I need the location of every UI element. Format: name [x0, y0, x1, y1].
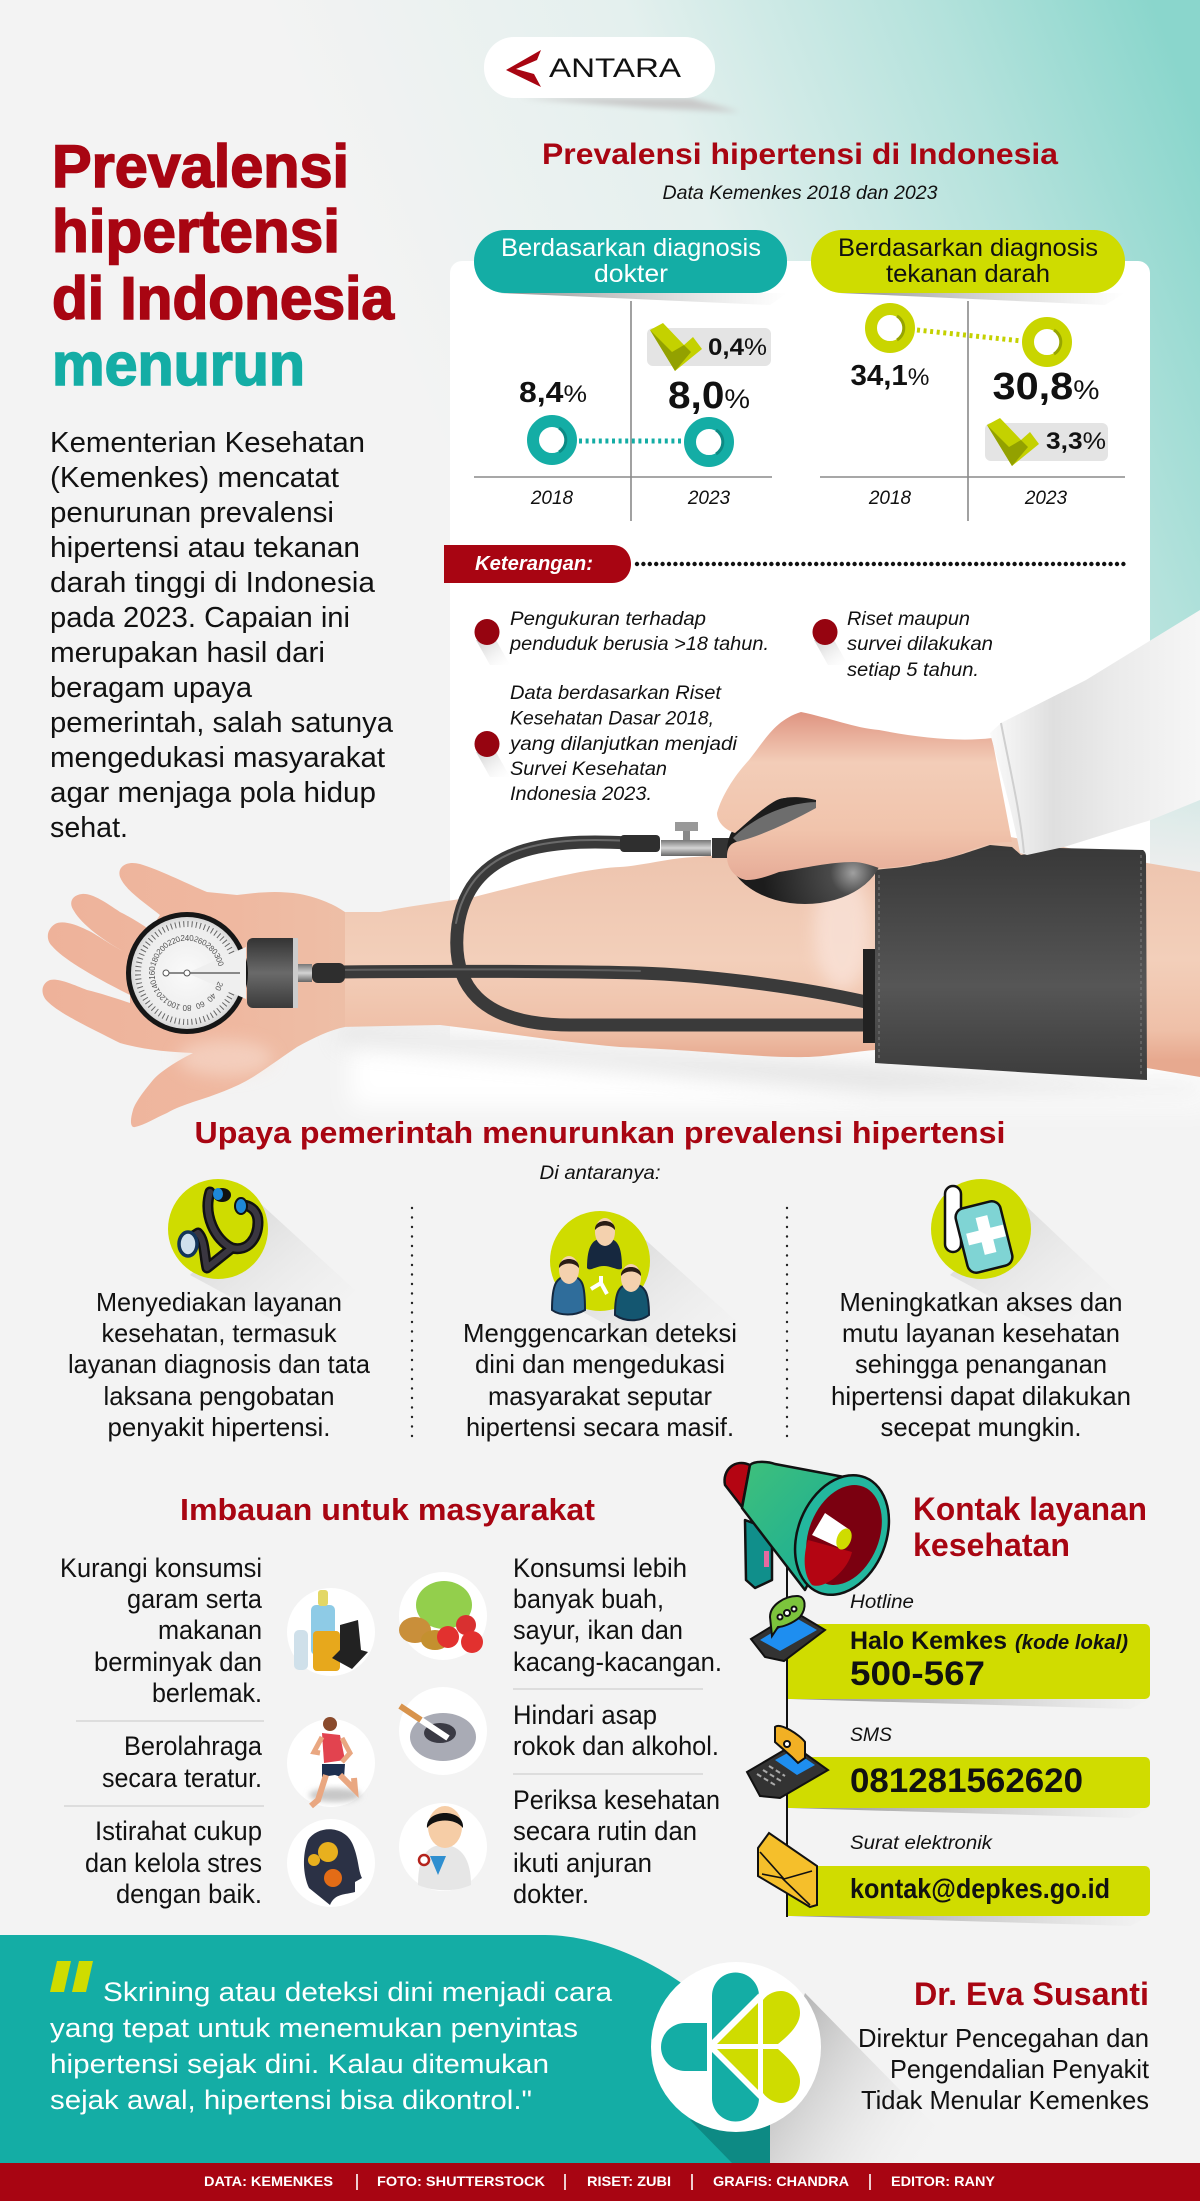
advice: exercise: Berolahraga [124, 1731, 262, 1761]
intro paragraph: Kementerian Kesehatan [50, 427, 365, 459]
illustration: arm with blood pressure monitor [42, 610, 1200, 1127]
intro paragraph: beragam upaya [50, 672, 252, 704]
advice: exercise: secara teratur. [102, 1763, 262, 1793]
intro paragraph: pemerintah, salah satunya [50, 707, 393, 739]
heading: imbauan: Imbauan untuk masyarakat [180, 1492, 595, 1527]
text: layanan diagnosis dan tata [68, 1349, 371, 1379]
logo: ANTARA: ANTARA [549, 53, 681, 83]
contact box 2: SMS [850, 1725, 892, 1746]
year labels: 2023 [687, 488, 731, 509]
note 1: Pengukuran terhadap [510, 609, 706, 630]
squeezing hand [717, 712, 1012, 880]
advice: rest [85, 1816, 262, 1909]
speaker: Dr. Eva Susanti [914, 1976, 1149, 2012]
gauge dial: 260 [192, 934, 209, 948]
chart heading: Data Kemenkes 2018 dan 2023 [662, 183, 938, 204]
gauge dial: 300 [212, 952, 226, 968]
contact box 1: Hotline [850, 1592, 914, 1613]
advice: fruit and vegetables: Konsumsi lebih [513, 1553, 687, 1583]
main title: hipertensi [52, 198, 340, 265]
icon: vegetables [399, 1572, 487, 1660]
text [831, 1287, 1131, 1442]
intro paragraph: sehat. [50, 812, 128, 844]
note 3: setiap 5 tahun. [847, 660, 979, 681]
note 2: Data berdasarkan Riset [510, 683, 722, 704]
icon: megaphone [725, 1461, 906, 1609]
gauge dial [126, 912, 248, 1034]
text: sehingga penanganan [855, 1349, 1107, 1379]
main title: di Indonesia [52, 265, 395, 332]
icon: runner [287, 1717, 375, 1807]
contact box 1: (kode lokal) [1015, 1632, 1128, 1654]
intro paragraph: darah tinggi di Indonesia [50, 567, 375, 599]
advice right column [513, 1553, 722, 1909]
gauge dial: 200 [155, 940, 171, 957]
advice: smoke and alcohol [513, 1700, 719, 1761]
value 2018: 8,4% [519, 377, 587, 409]
advice: salt and fat: berlemak. [152, 1678, 262, 1708]
text: dini dan mengedukasi [475, 1349, 725, 1379]
advice: smoke and alcohol: rokok dan alkohol. [513, 1731, 719, 1761]
text: Menyediakan layanan [96, 1287, 342, 1317]
icon: stressed head [287, 1819, 375, 1907]
gauge body [247, 938, 345, 1008]
icon: stethoscope [168, 1179, 268, 1279]
contact box 3 [787, 1833, 1150, 1926]
advice: rest: dan kelola stres [85, 1848, 262, 1878]
note 1 [474, 609, 769, 665]
value 2018: 34,1% [850, 360, 930, 392]
advice: checkup: dokter. [513, 1879, 589, 1909]
pill: diagnosis dokter [474, 230, 787, 293]
text: Meningkatkan akses dan [840, 1287, 1122, 1317]
contact box 3: kontak@depkes.go.id [850, 1873, 1110, 1904]
value 2023: 8,0% [668, 375, 750, 417]
advice: fruit and vegetables [513, 1553, 722, 1677]
intro paragraph: hipertensi atau tekanan [50, 532, 360, 564]
bulb [727, 796, 883, 904]
footer credits: RISET: ZUBI [587, 2173, 671, 2189]
speaker: Pengendalian Penyakit [890, 2054, 1150, 2084]
note 2 [474, 683, 738, 805]
contact box 2: 081281562620 [850, 1762, 1083, 1800]
badge: decrease 3,3% [985, 418, 1108, 466]
text [463, 1318, 737, 1442]
advice: smoke and alcohol: Hindari asap [513, 1700, 657, 1730]
year labels: 2023 [1024, 488, 1068, 509]
chart heading [542, 138, 1058, 204]
badge: decrease 3,3%: 3,3% [1046, 428, 1106, 455]
main title [52, 133, 395, 398]
gauge dial: 100 [165, 998, 182, 1012]
gauge dial: 160 [148, 966, 157, 980]
white chart panel [450, 261, 1150, 1040]
arm [340, 835, 1200, 1077]
footer credits: DATA: KEMENKES [204, 2173, 333, 2189]
footer credits: GRAFIS: CHANDRA [713, 2173, 849, 2189]
note 1: penduduk berusia >18 tahun. [509, 634, 769, 655]
intro paragraph: merupakan hasil dari [50, 637, 325, 669]
valve [620, 822, 732, 858]
icon: phone with chat [751, 1596, 825, 1661]
note 2: yang dilanjutkan menjadi [508, 734, 738, 755]
ring 2023 [690, 423, 728, 461]
intro paragraph: agar menjaga pola hidup [50, 777, 376, 809]
contact timeline [787, 1560, 1150, 1926]
quote text: Skrining atau deteksi dini menjadi cara [103, 1977, 613, 2007]
year labels [530, 488, 731, 509]
speaker: Direktur Pencegahan dan [858, 2023, 1149, 2053]
footer credits: EDITOR: RANY [891, 2173, 996, 2189]
keterangan tag: Keterangan: [475, 553, 593, 575]
text: secepat mungkin. [880, 1412, 1082, 1442]
pill: diagnosis dokter: Berdasarkan diagnosis [501, 234, 761, 262]
quote text: hipertensi sejak dini. Kalau ditemukan [50, 2049, 549, 2079]
keterangan tag [444, 545, 631, 583]
gauge dial: 20 [213, 980, 225, 993]
footer credits [0, 2163, 1200, 2201]
main title: Prevalensi [52, 133, 349, 200]
advice: checkup [513, 1785, 720, 1909]
text: hipertensi dapat dilakukan [831, 1381, 1131, 1411]
gauge dial: 60 [194, 999, 206, 1011]
text: penyakit hipertensi. [108, 1412, 330, 1442]
advice: salt and fat: makanan [158, 1615, 262, 1645]
gauge dial: 180 [148, 951, 162, 968]
gauge dial: 280 [203, 941, 220, 957]
icon: ashtray [399, 1687, 487, 1775]
ring 2023 [1028, 323, 1066, 361]
gauge dial: 140 [148, 978, 162, 994]
advice: salt and fat: berminyak dan [94, 1647, 262, 1677]
chart: diagnosis tekanan darah [811, 230, 1125, 521]
advice: rest: Istirahat cukup [95, 1816, 262, 1846]
value 2023: 30,8 % [992, 366, 1100, 408]
intro paragraph: mengedukasi masyarakat [50, 742, 385, 774]
intro paragraph: pada 2023. Capaian ini [50, 602, 350, 634]
cuff [863, 845, 1147, 1080]
contact box 1: Halo Kemkes [850, 1627, 1007, 1655]
pill: tekanan darah [811, 230, 1125, 293]
section heading: upaya pemerintah: Upaya pemerintah menurunkan prevalensi hipertensi [194, 1115, 1006, 1150]
quote panel [0, 1935, 949, 2163]
text: Menggencarkan deteksi [463, 1318, 737, 1348]
gauge dial: 40 [205, 991, 218, 1004]
notes [474, 609, 993, 805]
advice: rest: dengan baik. [116, 1879, 262, 1909]
ring 2018 [533, 421, 571, 459]
text: hipertensi secara masif. [466, 1412, 734, 1442]
note 2: Indonesia 2023. [510, 784, 652, 805]
intro paragraph [50, 427, 393, 844]
advice left column [60, 1553, 703, 1909]
note 3: survei dilakukan [847, 634, 993, 655]
note 3 [812, 609, 993, 681]
quote text: sejak awal, hipertensi bisa dikontrol." [50, 2085, 532, 2115]
text [68, 1287, 371, 1442]
advice: checkup: Periksa kesehatan [513, 1785, 720, 1815]
pill: diagnosis dokter: dokter [594, 260, 668, 288]
advice: fruit and vegetables: sayur, ikan dan [513, 1615, 683, 1645]
section heading: upaya pemerintah [194, 1115, 1006, 1184]
icon: keypad phone with chat [747, 1726, 828, 1798]
note 2: Survei Kesehatan [510, 759, 667, 780]
text: masyarakat seputar [488, 1381, 712, 1411]
year labels [868, 488, 1068, 509]
icon: bottles and fat [287, 1588, 375, 1676]
advice: checkup: ikuti anjuran [513, 1848, 652, 1878]
quote mark [50, 1961, 93, 1992]
intro paragraph: (Kemenkes) mencatat [50, 462, 339, 494]
note 3: Riset maupun [847, 609, 970, 630]
gauge dial: 240 [180, 934, 194, 943]
icon: envelope [758, 1833, 817, 1907]
note 2: Kesehatan Dasar 2018, [510, 708, 714, 730]
speaker [858, 1976, 1150, 2115]
contact box 3: Surat elektronik [850, 1833, 994, 1854]
contact heading: kesehatan [913, 1527, 1070, 1563]
tubes [340, 840, 866, 1025]
year labels: 2018 [868, 488, 912, 509]
contact heading: Kontak layanan [913, 1491, 1147, 1527]
pill: tekanan darah: tekanan darah [886, 260, 1050, 288]
text: laksana pengobatan [104, 1381, 334, 1411]
effort column 2 [463, 1211, 737, 1442]
footer credits: FOTO: SHUTTERSTOCK [377, 2173, 545, 2189]
pill: tekanan darah: Berdasarkan diagnosis [838, 234, 1098, 262]
section heading: upaya pemerintah: Di antaranya: [540, 1163, 660, 1184]
icon: medical kit [931, 1179, 1031, 1279]
advice: checkup: secara rutin dan [513, 1816, 697, 1846]
chart heading: Prevalensi hipertensi di Indonesia [542, 138, 1058, 171]
advice: exercise [102, 1731, 262, 1793]
advice: fruit and vegetables: banyak buah, [513, 1584, 664, 1614]
year labels: 2018 [530, 488, 574, 509]
logo: Kemenkes [651, 1962, 821, 2132]
contact heading [913, 1491, 1147, 1563]
icon: doctor [399, 1803, 487, 1891]
speaker: Tidak Menular Kemenkes [861, 2085, 1149, 2115]
advice: salt and fat: Kurangi konsumsi [60, 1553, 262, 1583]
text: kesehatan, termasuk [102, 1318, 337, 1348]
main title: menurun [52, 331, 305, 398]
effort column 3 [831, 1179, 1131, 1442]
gauge dial: 220 [166, 934, 182, 948]
advice: salt and fat: garam serta [127, 1584, 262, 1614]
gauge dial: 80 [182, 1003, 191, 1012]
quote text: yang tepat untuk menemukan penyintas [50, 2013, 578, 2043]
effort column 1 [68, 1179, 371, 1442]
advice: fruit and vegetables: kacang-kacangan. [513, 1647, 722, 1677]
text: mutu layanan kesehatan [842, 1318, 1120, 1348]
advice: salt and fat [60, 1553, 262, 1708]
chart: diagnosis dokter [474, 230, 787, 521]
contact box 2 [787, 1725, 1150, 1818]
gauge dial: 120 [154, 989, 171, 1005]
badge: decrease 0,4% [647, 323, 771, 371]
sleeve [990, 610, 1200, 855]
contact box 1 [787, 1592, 1150, 1709]
quote text [50, 1977, 613, 2115]
badge: decrease 0,4%: 0,4% [708, 334, 767, 361]
logo: ANTARA [484, 37, 740, 112]
ring 2018 [871, 309, 909, 347]
contact box 1: 500-567 [850, 1655, 985, 1693]
open hand [42, 863, 345, 1127]
icon: three people [550, 1211, 650, 1320]
intro paragraph: penurunan prevalensi [50, 497, 334, 529]
